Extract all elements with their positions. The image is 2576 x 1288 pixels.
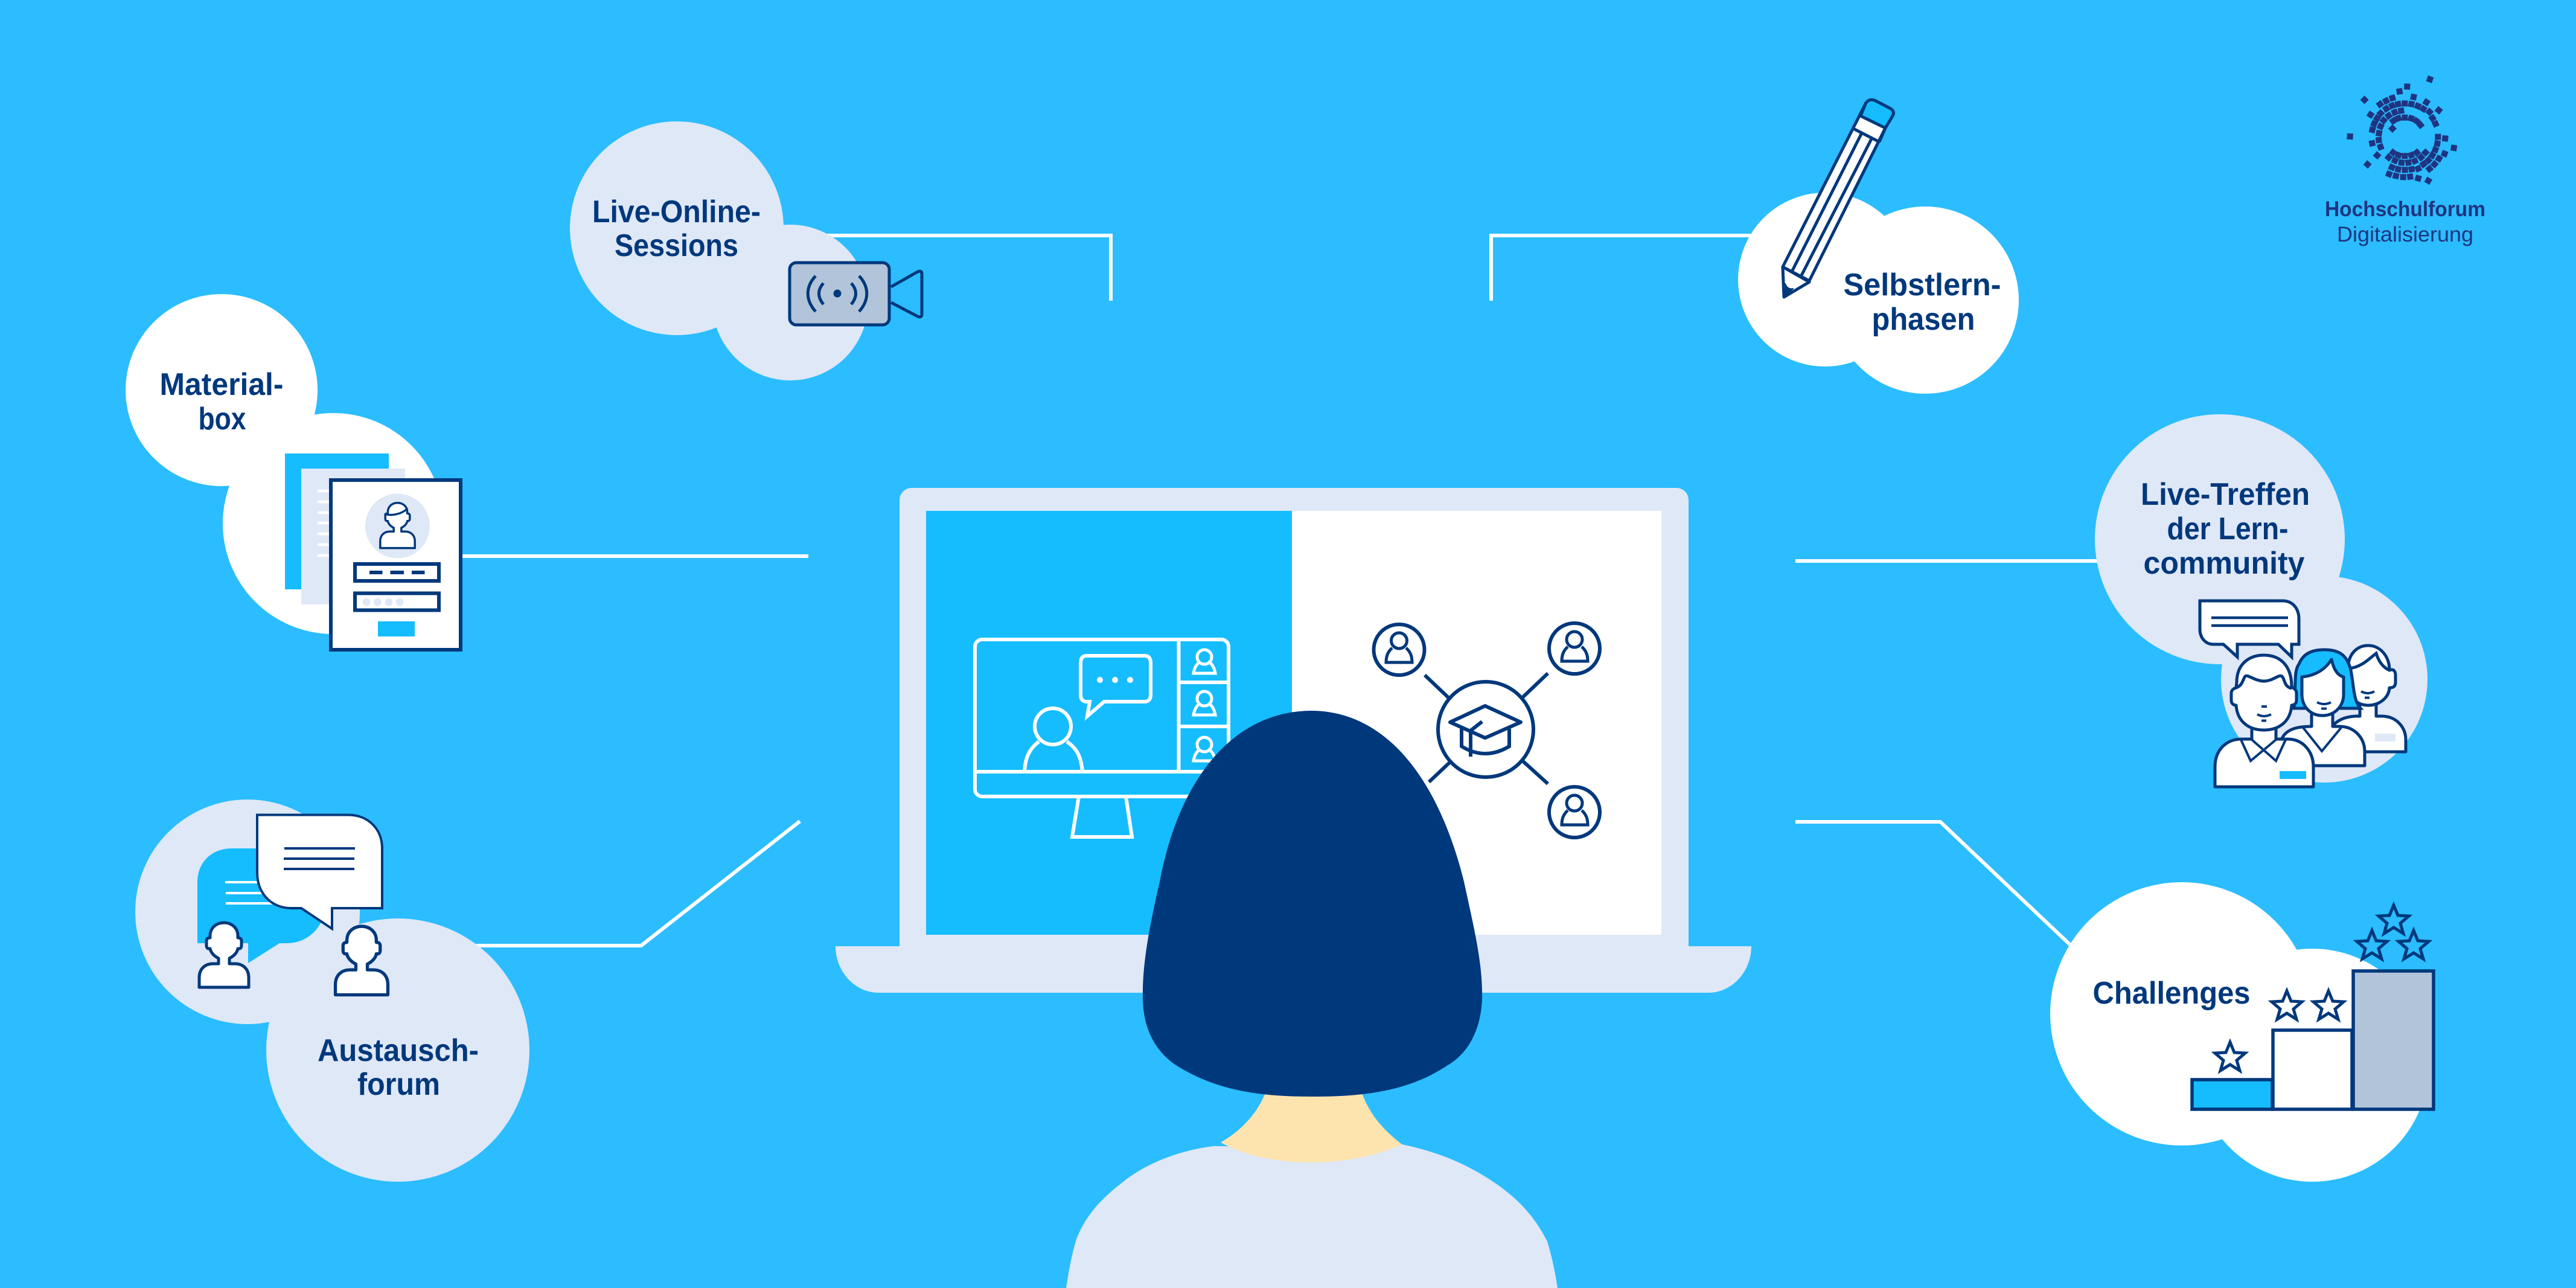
label: Selbstlernphasen: Selbstlern- [1844,268,2001,303]
label: Austauschforum: forum [357,1067,440,1102]
label: Live-Treffen der Lerncommunity: der Lern- [2167,511,2288,546]
icon: video conference monitor [975,639,1229,837]
logo wordmark [2325,197,2485,246]
logo mark [2347,75,2457,185]
icon: back person [2330,646,2406,752]
laptop [836,488,1751,993]
person seen from behind [1066,711,1558,1288]
icon: login form [331,480,461,650]
icon: pencil [1783,100,1893,298]
logo wordmark: Digitalisierung [2337,223,2473,246]
label: Materialbox [159,367,284,437]
icon: video camera [790,263,922,325]
icon: speech bubble [2200,601,2299,657]
panel: Challenges [2050,882,2434,1182]
label: Live-Online-Sessions: Sessions [615,228,738,263]
label: Challenges: Challenges [2092,976,2251,1011]
label: Materialbox: box [198,402,246,437]
label: Selbstlernphasen [1844,268,2001,337]
panel: Live-Online-Sessions [570,121,922,380]
panel: Selbstlernphasen [1738,100,2019,394]
label: Austauschforum: Austausch- [318,1033,479,1068]
logo: Hochschulforum Digitalisierung [2325,75,2485,246]
label: Live-Treffen der Lerncommunity: Live-Treffen [2141,477,2310,512]
icon: stars [2215,905,2429,1071]
icon: white speech bubble [257,815,382,929]
label: Live-Online-Sessions [592,194,761,263]
icon: woman with blue hair [2281,650,2365,766]
icon: podium bars [2192,971,2434,1109]
body [1066,1144,1558,1288]
label: Live-Treffen der Lerncommunity: community [2143,546,2305,581]
icon: blue speech bubble [197,848,325,963]
icon: graduation network [1374,623,1600,838]
icon: right person [336,926,388,995]
connector lines [459,235,2113,951]
label: Live-Online-Sessions: Live-Online- [592,194,761,229]
logo wordmark: Hochschulforum [2325,197,2485,221]
panel: Materialbox [126,294,461,650]
panel: Austauschforum [135,799,529,1182]
icon: left person [199,923,249,987]
label: Live-Treffen der Lerncommunity [2141,477,2310,581]
label: Materialbox: Material- [159,367,284,402]
icon: document stack [285,453,405,604]
panel: Live-Treffen der Lerncommunity [2095,414,2427,787]
label: Austauschforum [318,1033,479,1102]
label: Selbstlernphasen: phasen [1871,302,1975,337]
neck [1221,1090,1402,1162]
icon: front person [2215,655,2313,787]
hair [1143,711,1482,1097]
